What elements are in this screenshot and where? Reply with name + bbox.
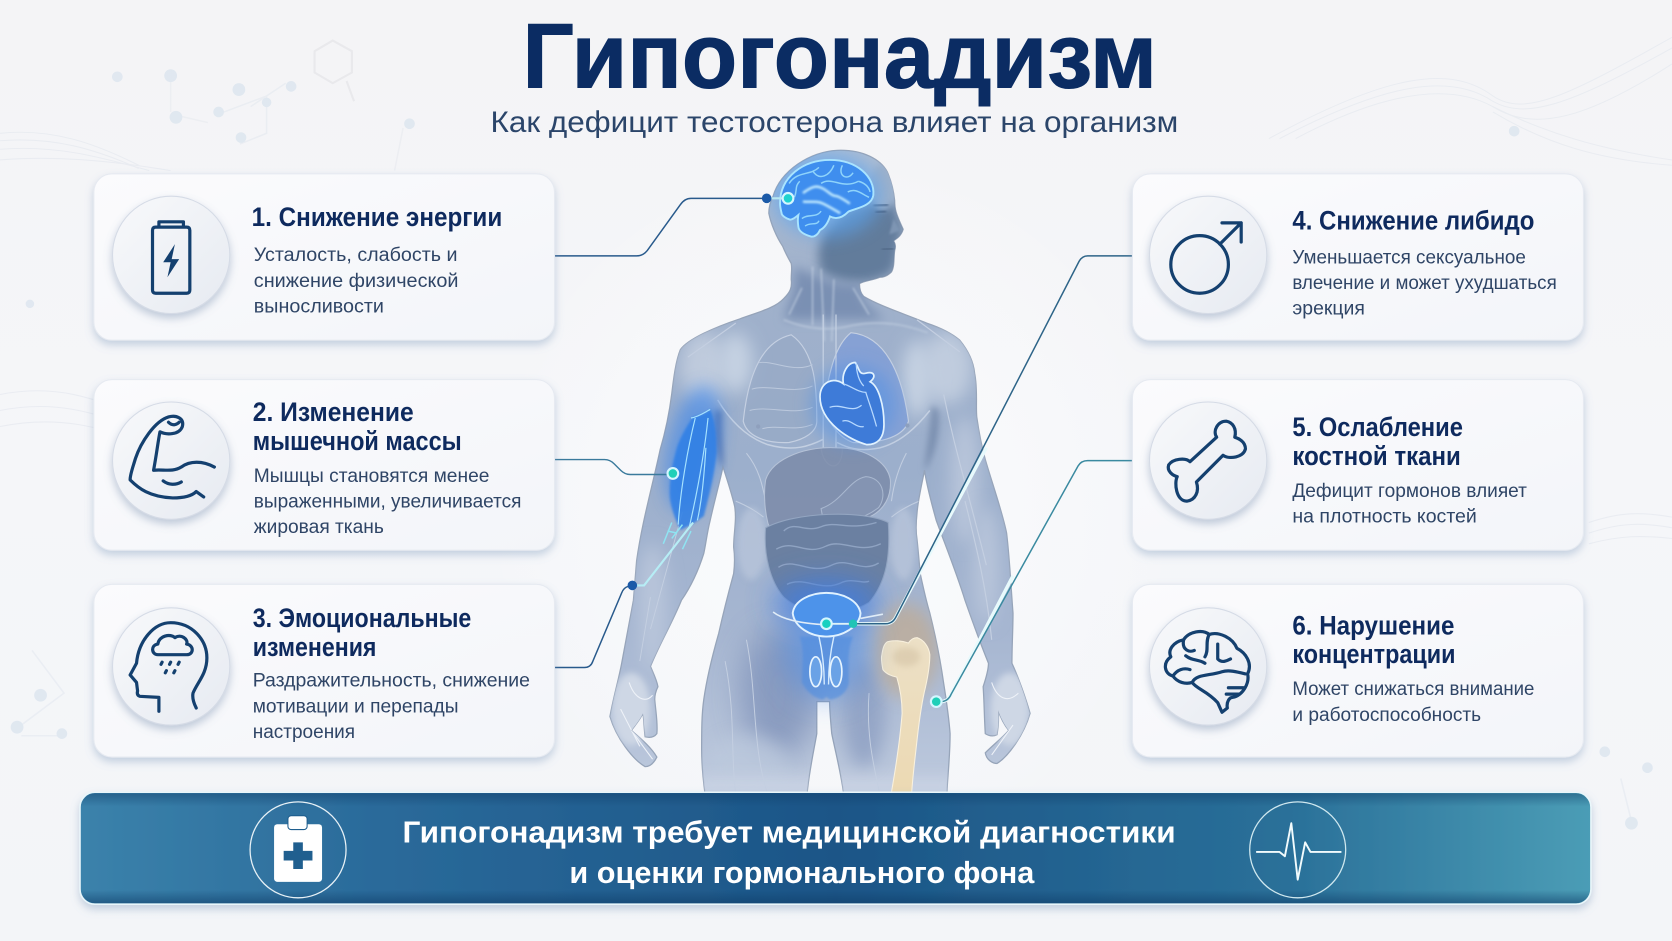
icon: medical clipboard: [250, 802, 346, 898]
neck: [784, 267, 885, 320]
shoulder and chest highlights: [680, 332, 727, 404]
text block: [253, 397, 521, 538]
connector 4: libido to pelvis: [821, 256, 1132, 629]
text block: концентрации: [1292, 639, 1456, 669]
banner text: [403, 814, 1176, 890]
icon: brain: [1149, 608, 1267, 725]
icon: bone: [1149, 402, 1267, 519]
thigh shading: [740, 629, 817, 757]
icon: battery: [113, 196, 230, 313]
icon: flexed arm: [113, 402, 230, 519]
banner text: Гипогонадизм требует медицинской диагностики: [403, 814, 1176, 849]
face shading: [818, 201, 903, 282]
text block: костной ткани: [1292, 441, 1461, 471]
lungs: [743, 335, 817, 443]
intestines: [765, 514, 889, 613]
brain region glow: [771, 152, 882, 238]
text block: снижение физической: [254, 271, 459, 292]
panel: 1 energy: [94, 174, 554, 340]
text block: эрекция: [1292, 299, 1365, 320]
connector 5: bone to femur: [931, 461, 1132, 707]
text block: выносливости: [254, 296, 384, 317]
text block: [253, 603, 530, 743]
human body figure: [610, 150, 1030, 800]
text block: 4. Снижение либидо: [1292, 205, 1534, 235]
icon: male symbol: [1149, 196, 1267, 313]
arm glow: [655, 380, 731, 516]
panel: 5 bone: [1132, 380, 1583, 550]
femur bone: [881, 638, 930, 792]
icon: heartbeat pulse: [1250, 802, 1346, 898]
text block: 3. Эмоциональные: [253, 603, 471, 633]
text block: жировая ткань: [254, 517, 384, 538]
text block: [1292, 412, 1527, 527]
panel: 6 concentration: [1132, 584, 1583, 757]
subtitle: Как дефицит тестостерона влияет на организм: [491, 106, 1178, 139]
text block: [1292, 205, 1557, 320]
text block: [252, 202, 502, 317]
text block: Раздражительность, снижение: [253, 671, 530, 692]
icon: head with rain cloud: [113, 608, 230, 725]
arm and leg lines: [688, 320, 992, 640]
connector 2: muscle to arm: [554, 460, 678, 479]
text block: мотивации и перепады: [253, 696, 459, 717]
text block: и работоспособность: [1292, 705, 1481, 726]
connector 3: emotion to arm: [554, 522, 693, 667]
text block: 2. Изменение: [253, 397, 414, 427]
liver and stomach: [765, 448, 890, 529]
panel: 3 emotions: [94, 584, 554, 757]
text block: мышечной массы: [253, 426, 462, 456]
text block: влечение и может ухудшаться: [1292, 273, 1557, 294]
panel: 2 muscle: [94, 380, 554, 550]
text block: Усталость, слабость и: [254, 245, 457, 266]
text block: изменения: [253, 632, 376, 662]
icon: glowing pelvic organs: [773, 593, 883, 699]
text block: Может снижаться внимание: [1292, 679, 1534, 700]
pectoral lines: [718, 400, 930, 450]
text block: Мышцы становятся менее: [254, 466, 489, 487]
icon: glowing heart: [810, 363, 896, 446]
banner text: и оценки гормонального фона: [569, 855, 1035, 890]
panel: 4 libido: [1132, 174, 1583, 340]
text block: Уменьшается сексуальное: [1292, 247, 1526, 268]
text block: Дефицит гормонов влияет: [1292, 481, 1527, 502]
text block: на плотность костей: [1292, 506, 1477, 527]
text block: 1. Снижение энергии: [252, 202, 502, 232]
connector 1: energy to brain: [554, 193, 793, 256]
icon: glowing brain: [780, 160, 873, 237]
text block: выраженными, увеличивается: [254, 492, 521, 513]
hip tint: [874, 604, 938, 697]
icon: glowing arm muscle: [663, 409, 717, 549]
title: Гипогонадизм: [523, 5, 1157, 107]
text block: 6. Нарушение: [1292, 610, 1454, 640]
text block: настроения: [253, 722, 355, 743]
text block: 5. Ослабление: [1292, 412, 1463, 442]
footer banner: [80, 792, 1591, 904]
text block: [1292, 610, 1534, 726]
